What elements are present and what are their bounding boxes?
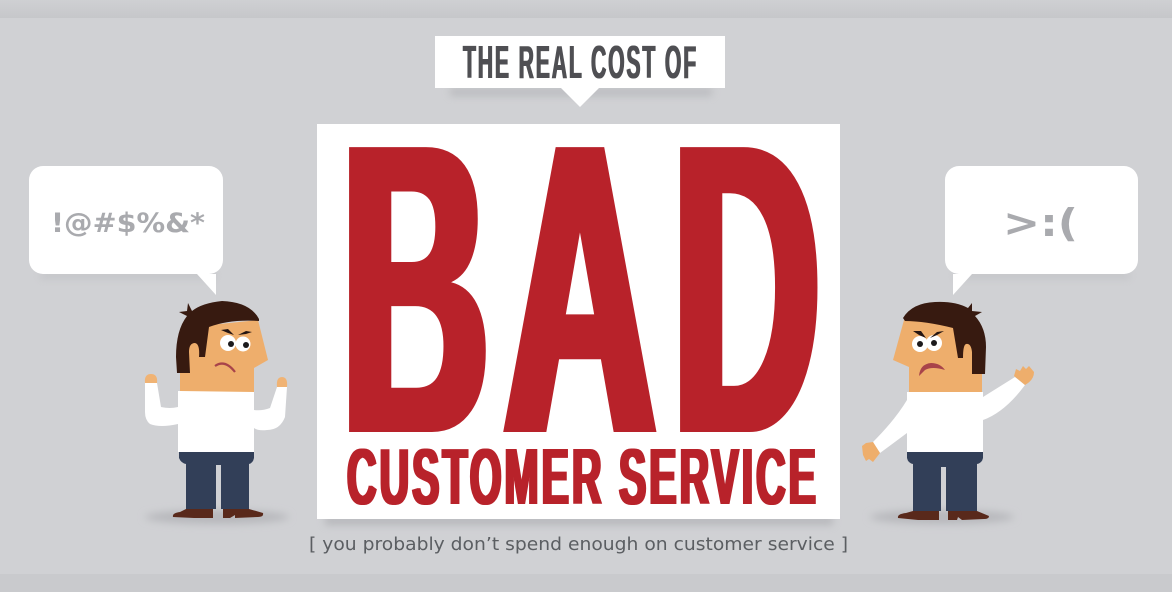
arms and shirt [873, 377, 1025, 453]
face [893, 318, 982, 392]
heading: BAD: A [504, 58, 655, 520]
subtitle: [ you probably don’t spend enough on customer service ] [309, 534, 848, 555]
pants [179, 452, 254, 509]
eyes [220, 335, 236, 351]
heading: BAD: B [342, 59, 488, 521]
speech bubble: right: >:( [1003, 201, 1078, 245]
shoes [173, 509, 263, 518]
hands [862, 366, 1034, 462]
banner: the real cost of: THE REAL COST OF [463, 36, 698, 88]
shoes [898, 511, 989, 520]
character: right angry man [862, 302, 1034, 524]
heading: BAD: D [673, 59, 819, 521]
pants [907, 452, 983, 511]
face [180, 320, 268, 392]
mouth [215, 364, 235, 372]
eyebrows [221, 329, 252, 335]
hair [176, 301, 259, 373]
speech bubble: right [945, 166, 1138, 295]
speech bubble: left: !@#$%&* [51, 208, 205, 239]
heading: BAD [342, 58, 819, 521]
hair [903, 302, 986, 374]
eyes [912, 336, 928, 352]
mouth [919, 363, 945, 376]
eyebrows [913, 331, 944, 338]
panel: main title [317, 58, 840, 525]
character: left angry man [145, 301, 289, 524]
banner: the real cost of [435, 36, 725, 107]
hands [145, 374, 287, 387]
speech bubble: left [29, 166, 223, 295]
arms and shirt [145, 383, 287, 452]
